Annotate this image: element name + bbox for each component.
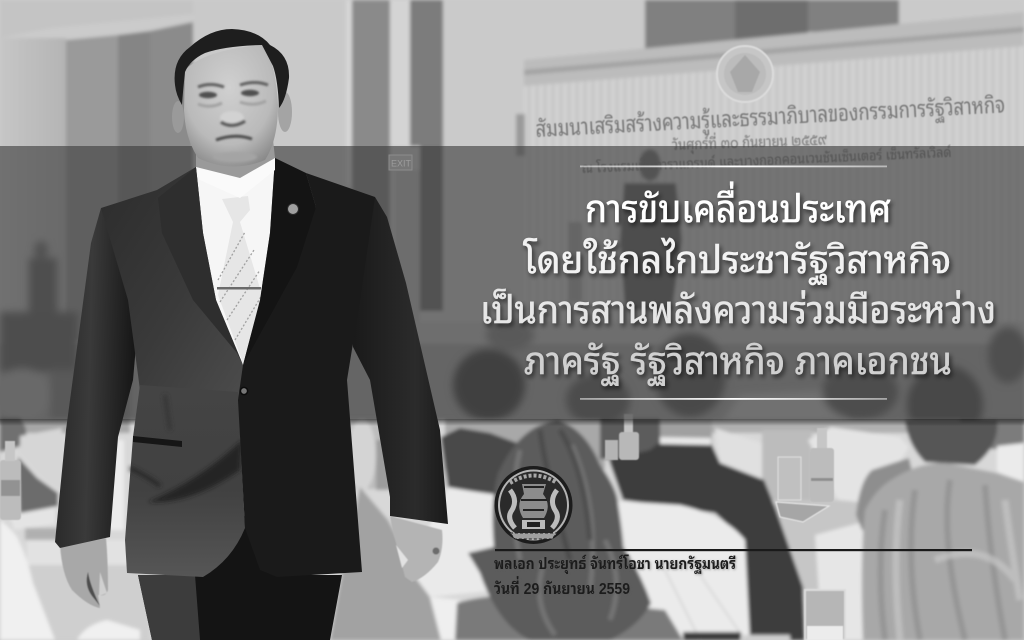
audience in dim band bbox=[0, 241, 1024, 445]
left hand bbox=[60, 538, 108, 608]
lower room: tables and chairs bbox=[0, 418, 1024, 640]
jacket wrinkle shadows bbox=[130, 395, 242, 502]
jacket right side bbox=[238, 173, 375, 577]
jacket lower left panel bbox=[125, 385, 245, 577]
top rule bbox=[580, 166, 887, 167]
statement text bbox=[480, 181, 996, 387]
seal ornament: guardian lions bbox=[510, 490, 557, 528]
speaker on stage bbox=[639, 149, 661, 181]
right sleeve bbox=[340, 197, 448, 524]
seal ornament: base plaque bbox=[522, 520, 545, 529]
white chairs in the foreground left bbox=[0, 520, 55, 640]
exit sign: EXIT bbox=[391, 158, 412, 168]
jacket button bbox=[240, 387, 248, 395]
statement text: การขับเคลื่อนประเทศ bbox=[585, 181, 891, 231]
statement text: เป็นการสานพลังความร่วมมือระหว่าง bbox=[480, 288, 996, 332]
main statement block bbox=[480, 166, 996, 400]
statement text: โดยใช้กลไกประชารัฐวิสาหกิจ bbox=[523, 236, 951, 286]
right hand bbox=[390, 516, 442, 582]
right chair bbox=[815, 522, 863, 640]
government seal emblem bbox=[494, 466, 572, 544]
right lapel bbox=[243, 158, 316, 365]
grey hair head bbox=[862, 463, 1024, 640]
neck bbox=[196, 130, 275, 182]
banner seal bbox=[717, 46, 773, 102]
center and right room bbox=[345, 419, 445, 489]
left sleeve bbox=[55, 208, 140, 548]
exit sign bbox=[389, 155, 412, 170]
banner text: ณ โรงแรมเซ็นทาราแกรนด์ และบางกอกคอนเวนชันเซ็นเตอร์ เซ็นทรัลเวิลด์ bbox=[581, 144, 952, 176]
seal ornament: central urn bbox=[519, 484, 548, 518]
seal ornament: top crest bbox=[510, 476, 557, 483]
statement text: ภาครัฐ รัฐวิสาหกิจ ภาคเอกชน bbox=[524, 341, 952, 387]
portrait: prime minister walking bbox=[55, 29, 448, 640]
woman with long hair bbox=[455, 596, 683, 640]
suit back, right of hair bbox=[609, 442, 805, 640]
signature rule bbox=[495, 549, 972, 551]
tie bbox=[217, 196, 262, 363]
person with dark hair bbox=[856, 458, 925, 530]
hair bbox=[175, 29, 289, 108]
left lapel bbox=[158, 167, 243, 365]
banner text bbox=[535, 91, 1006, 176]
tie bar bbox=[217, 287, 261, 290]
signature block bbox=[494, 549, 972, 598]
lapel pin bbox=[288, 204, 298, 214]
ears bbox=[172, 101, 184, 133]
bottom rule bbox=[580, 398, 887, 400]
dark translucent band bbox=[0, 146, 1024, 426]
trousers bbox=[138, 515, 342, 640]
white chair back bbox=[618, 501, 750, 640]
facial features bbox=[198, 82, 268, 162]
jacket pocket bbox=[133, 436, 182, 447]
suit back, left of hair bbox=[441, 428, 517, 497]
date: วันที่ 29 กันยายน 2559 bbox=[494, 576, 630, 598]
banner text: วันศุกร์ที่ ๓๐ กันยายน ๒๕๕๙ bbox=[671, 129, 827, 155]
audience member, grey top bbox=[330, 487, 441, 640]
jacket upper left bbox=[101, 167, 245, 400]
shirt bbox=[196, 158, 275, 365]
banner curtain bbox=[524, 45, 1024, 325]
name and title: พลเอก ประยุทธ์ จันทร์โอชา นายกรัฐมนตรี bbox=[494, 554, 736, 575]
face bbox=[184, 45, 278, 167]
bottles, glasses and tablet bbox=[0, 414, 845, 640]
